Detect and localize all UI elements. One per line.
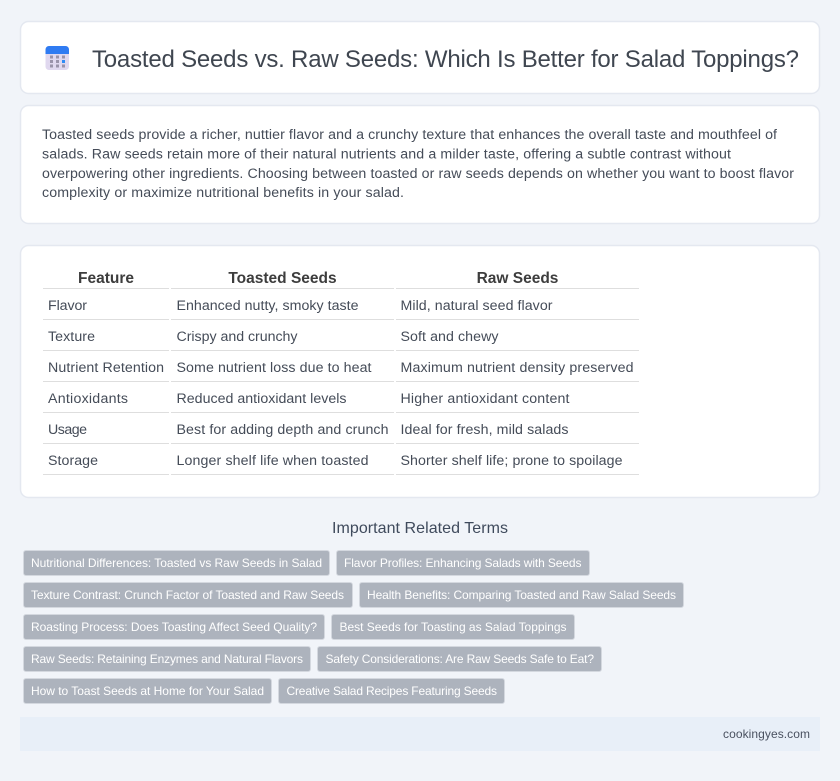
row: texture: Texture [48, 329, 95, 345]
table header: Toasted Seeds [228, 270, 337, 287]
tag [332, 614, 574, 640]
tag [360, 582, 684, 608]
row: texture: Crispy and crunchy [176, 329, 298, 345]
row: usage: Usage [48, 422, 87, 438]
row: antioxidants [48, 391, 570, 407]
text block: introduction: overpowering other ingredients. Choosing between toasted or raw seeds depends on whether you want to boost flavor [42, 166, 794, 182]
row: flavor: Enhanced nutty, smoky taste [176, 298, 359, 314]
icon: calendar [46, 46, 69, 70]
related terms tags [24, 550, 684, 704]
row: texture: Soft and chewy [400, 329, 499, 345]
row: flavor [48, 298, 553, 314]
title: Toasted Seeds vs. Raw Seeds: Which Is Better for Salad Toppings? [92, 46, 799, 73]
tag [24, 678, 272, 704]
row: nutrient retention: Some nutrient loss due to heat [176, 360, 372, 376]
tag: Texture Contrast: Crunch Factor of Toasted and Raw Seeds [31, 588, 344, 602]
row: flavor: Flavor [48, 298, 87, 314]
table header [78, 270, 558, 287]
row: nutrient retention: Maximum nutrient density preserved [400, 360, 634, 376]
table header: Raw Seeds [477, 270, 558, 287]
tag: Nutritional Differences: Toasted vs Raw Seeds in Salad [31, 556, 322, 570]
text block: introduction: Toasted seeds provide a richer, nuttier flavor and a crunchy texture that enhances the overall taste and mouthfeel of [42, 127, 777, 143]
tag: Roasting Process: Does Toasting Affect Seed Quality? [31, 620, 317, 634]
row: antioxidants: Antioxidants [48, 391, 128, 407]
text block: introduction: complexity or maximize nutritional benefits in your salad. [42, 185, 404, 201]
tag: Flavor Profiles: Enhancing Salads with Seeds [344, 556, 582, 570]
panel: introduction [20, 106, 820, 224]
tag [24, 550, 330, 576]
text block: introduction [42, 127, 794, 201]
table header: Feature [78, 270, 134, 287]
table rules [43, 288, 639, 474]
row: nutrient retention [48, 360, 634, 376]
tag: Health Benefits: Comparing Toasted and Raw Salad Seeds [367, 588, 676, 602]
tag [278, 678, 504, 704]
tag [24, 582, 352, 608]
tag: Safety Considerations: Are Raw Seeds Safe to Eat? [326, 652, 594, 666]
tag [318, 646, 602, 672]
row: nutrient retention: Nutrient Retention [48, 360, 164, 376]
row: storage: Longer shelf life when toasted [176, 453, 368, 469]
tag [336, 550, 590, 576]
tag: Raw Seeds: Retaining Enzymes and Natural Flavors [31, 652, 303, 666]
row: storage: Storage [48, 453, 98, 469]
heading: related terms: Important Related Terms [332, 520, 508, 537]
footer [20, 717, 820, 751]
row: usage: Best for adding depth and crunch [176, 422, 388, 438]
tag: How to Toast Seeds at Home for Your Salad [31, 684, 264, 698]
panel: comparison table [20, 246, 820, 498]
row: texture [48, 329, 499, 345]
row: usage [48, 422, 568, 438]
row: antioxidants: Reduced antioxidant levels [176, 391, 346, 407]
row: flavor: Mild, natural seed flavor [400, 298, 553, 314]
footer: cookingyes.com [723, 727, 810, 741]
tag: Best Seeds for Toasting as Salad Toppings [340, 620, 566, 634]
row: antioxidants: Higher antioxidant content [400, 391, 570, 407]
row: storage: Shorter shelf life; prone to spoilage [400, 453, 623, 469]
row: storage [48, 453, 623, 469]
tag [24, 646, 310, 672]
tag: Creative Salad Recipes Featuring Seeds [286, 684, 497, 698]
text block: introduction: salads. Raw seeds retain more of their natural nutrients and a milder taste, offering a subtle contrast without [42, 146, 731, 162]
tag [24, 614, 324, 640]
row: usage: Ideal for fresh, mild salads [400, 422, 568, 438]
panel: header [20, 22, 820, 94]
